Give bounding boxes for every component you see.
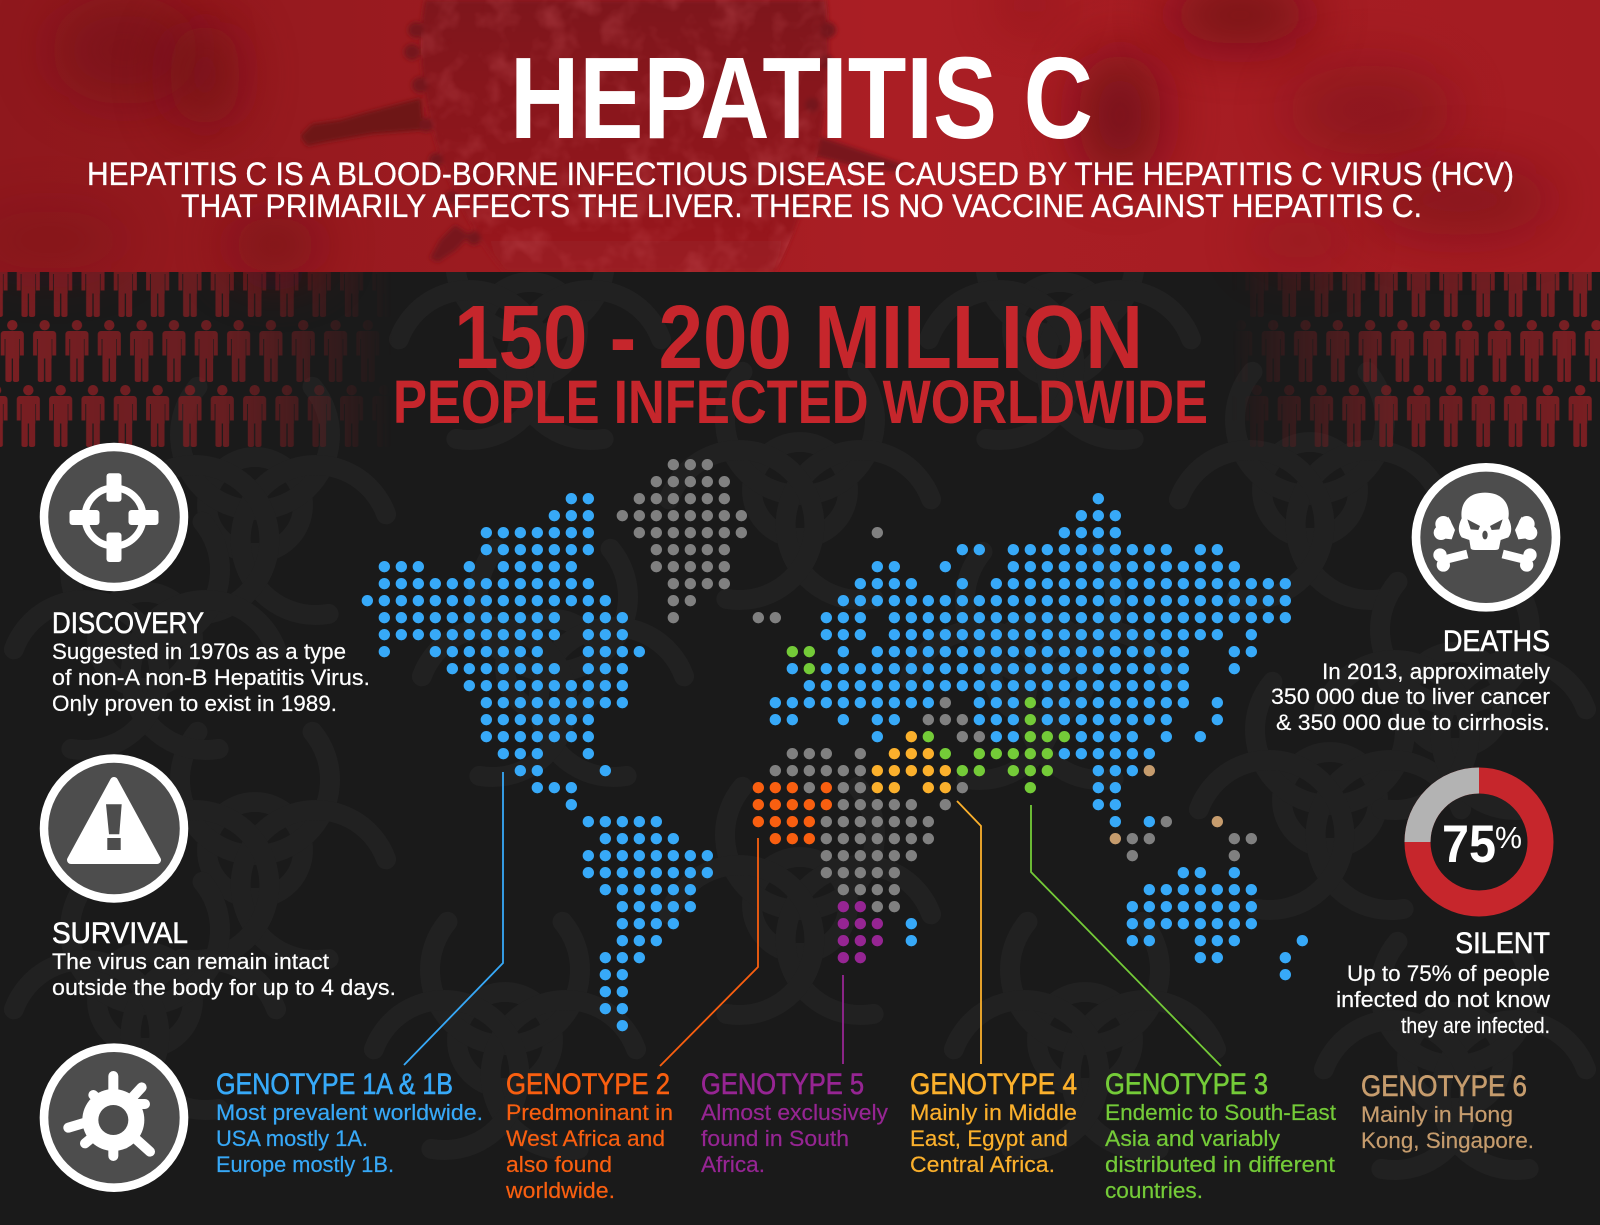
heading: silent: SILENT (1455, 927, 1550, 960)
donut chart: 75 percent: 75 (1442, 815, 1496, 874)
panel: survival (44, 758, 396, 1000)
text: silent (1336, 961, 1550, 1038)
donut chart: 75 percent (1404, 768, 1540, 904)
heading: genotype 6: GENOTYPE 6 (1361, 1070, 1527, 1103)
virus illustration (300, 0, 905, 272)
panel: discovery (44, 447, 370, 716)
header banner (0, 0, 1600, 275)
text: genotype 6: Kong, Singapore. (1361, 1128, 1534, 1153)
icon: warning triangle (44, 758, 184, 898)
heading: deaths: DEATHS (1443, 625, 1550, 658)
icon: skull and crossbones (1416, 467, 1556, 607)
leader line: genotype 2 (660, 838, 758, 1066)
subtitle: THAT PRIMARILY AFFECTS THE LIVER. THERE IS NO VACCINE AGAINST HEPATITIS C. (181, 188, 1422, 224)
text: genotype 4: Central Africa. (910, 1152, 1055, 1177)
text: genotype 4: East, Egypt and (910, 1126, 1068, 1151)
text: genotype 5: found in South (701, 1126, 849, 1151)
dots: genotype 3 green (792, 652, 1064, 788)
text: genotype 2 (505, 1100, 673, 1203)
text: silent: infected do not know (1336, 987, 1550, 1012)
world dot map (367, 465, 1303, 1026)
text: genotype 2: also found (506, 1152, 612, 1177)
text: silent: Up to 75% of people (1347, 961, 1550, 986)
text: genotype 3: Endemic to South-East (1105, 1100, 1336, 1125)
heading: genotype 2: GENOTYPE 2 (506, 1068, 670, 1101)
text: deaths (1271, 659, 1550, 735)
text: genotype 1: Most prevalent worldwide. (216, 1100, 483, 1125)
panel: deaths (1271, 467, 1556, 735)
dots: genotype 5 purple (843, 907, 878, 958)
text: genotype 3: distributed in different (1105, 1152, 1335, 1177)
text: genotype 3: countries. (1105, 1178, 1203, 1203)
panel: genotype 5 (701, 1068, 888, 1177)
dots: unclassified grey (622, 465, 1252, 907)
dots: genotype 4 yellow (877, 737, 945, 788)
text: genotype 2: worldwide. (505, 1178, 615, 1203)
leader line: genotype 5 (842, 975, 844, 1064)
text: silent: they are infected. (1401, 1013, 1550, 1038)
text: survival: The virus can remain intact (52, 949, 329, 974)
text: genotype 6 (1361, 1102, 1534, 1153)
subtitle: HEPATITIS C IS A BLOOD-BORNE INFECTIOUS DISEASE CAUSED BY THE HEPATITIS C VIRUS (HCV) (87, 156, 1514, 192)
text: discovery (52, 639, 370, 716)
dots: genotype 2 orange (758, 788, 826, 839)
text: genotype 4: Mainly in Middle (910, 1100, 1077, 1125)
text: genotype 2: West Africa and (506, 1126, 665, 1151)
text: genotype 5: Almost exclusively (701, 1100, 888, 1125)
text: genotype 1: Europe mostly 1B. (216, 1152, 394, 1177)
text: genotype 2: Predmoninant in (506, 1100, 673, 1125)
text: genotype 1: USA mostly 1A. (216, 1126, 368, 1151)
heading: discovery: DISCOVERY (52, 607, 204, 640)
text: deaths: In 2013, approximately (1322, 659, 1550, 684)
text: discovery: of non-A non-B Hepatitis Virus. (52, 665, 370, 690)
text: discovery: Only proven to exist in 1989. (52, 691, 337, 716)
leader line: genotype 4 (957, 801, 981, 1064)
panel: genotype 2 (505, 1068, 673, 1203)
people rows (0, 272, 1600, 448)
text: genotype 3: Asia and variably (1105, 1126, 1280, 1151)
text: survival: outside the body for up to 4 days. (52, 975, 396, 1000)
text: deaths: 350 000 due to liver cancer (1271, 684, 1550, 709)
donut chart: 75 percent: % (1495, 820, 1522, 855)
panel: genotype 4 (910, 1068, 1077, 1177)
leader line: genotype 3 (1031, 805, 1221, 1066)
text: survival (52, 949, 396, 1000)
dots: genotype 6 tan (1115, 771, 1218, 839)
heading: genotype 1a and 1b: GENOTYPE 1A & 1B (216, 1068, 453, 1101)
text: genotype 6: Mainly in Hong (1361, 1102, 1513, 1127)
title: HEPATITIS C (510, 33, 1093, 163)
text: deaths: & 350 000 due to cirrhosis. (1276, 710, 1550, 735)
panel: genotype 3 (1105, 1068, 1336, 1203)
subtitle (87, 156, 1514, 224)
text: genotype 1 (216, 1100, 483, 1177)
leader line: genotype 1 (404, 772, 503, 1065)
icon: crosshair (44, 447, 184, 587)
text: discovery: Suggested in 1970s as a type (52, 639, 346, 664)
panel: genotype 1a and 1b (216, 1068, 483, 1177)
text: genotype 5: Africa. (701, 1152, 765, 1177)
text: genotype 5 (701, 1100, 888, 1177)
icon: virus gear (44, 1048, 184, 1188)
biohazard background pattern (5, 212, 1595, 1184)
panel: silent (1336, 768, 1550, 1038)
panel: genotype 6 (1361, 1070, 1534, 1153)
heading: genotype 3: GENOTYPE 3 (1105, 1068, 1268, 1101)
heading: survival: SURVIVAL (52, 917, 188, 950)
headline number: 150 - 200 MILLION (454, 288, 1143, 388)
heading: genotype 5: GENOTYPE 5 (701, 1068, 864, 1101)
text: genotype 3 (1105, 1100, 1336, 1203)
headline caption: PEOPLE INFECTED WORLDWIDE (393, 368, 1208, 436)
heading: genotype 4: GENOTYPE 4 (910, 1068, 1077, 1101)
dots: genotype 1 blue (367, 499, 1303, 1026)
text: genotype 4 (910, 1100, 1077, 1177)
